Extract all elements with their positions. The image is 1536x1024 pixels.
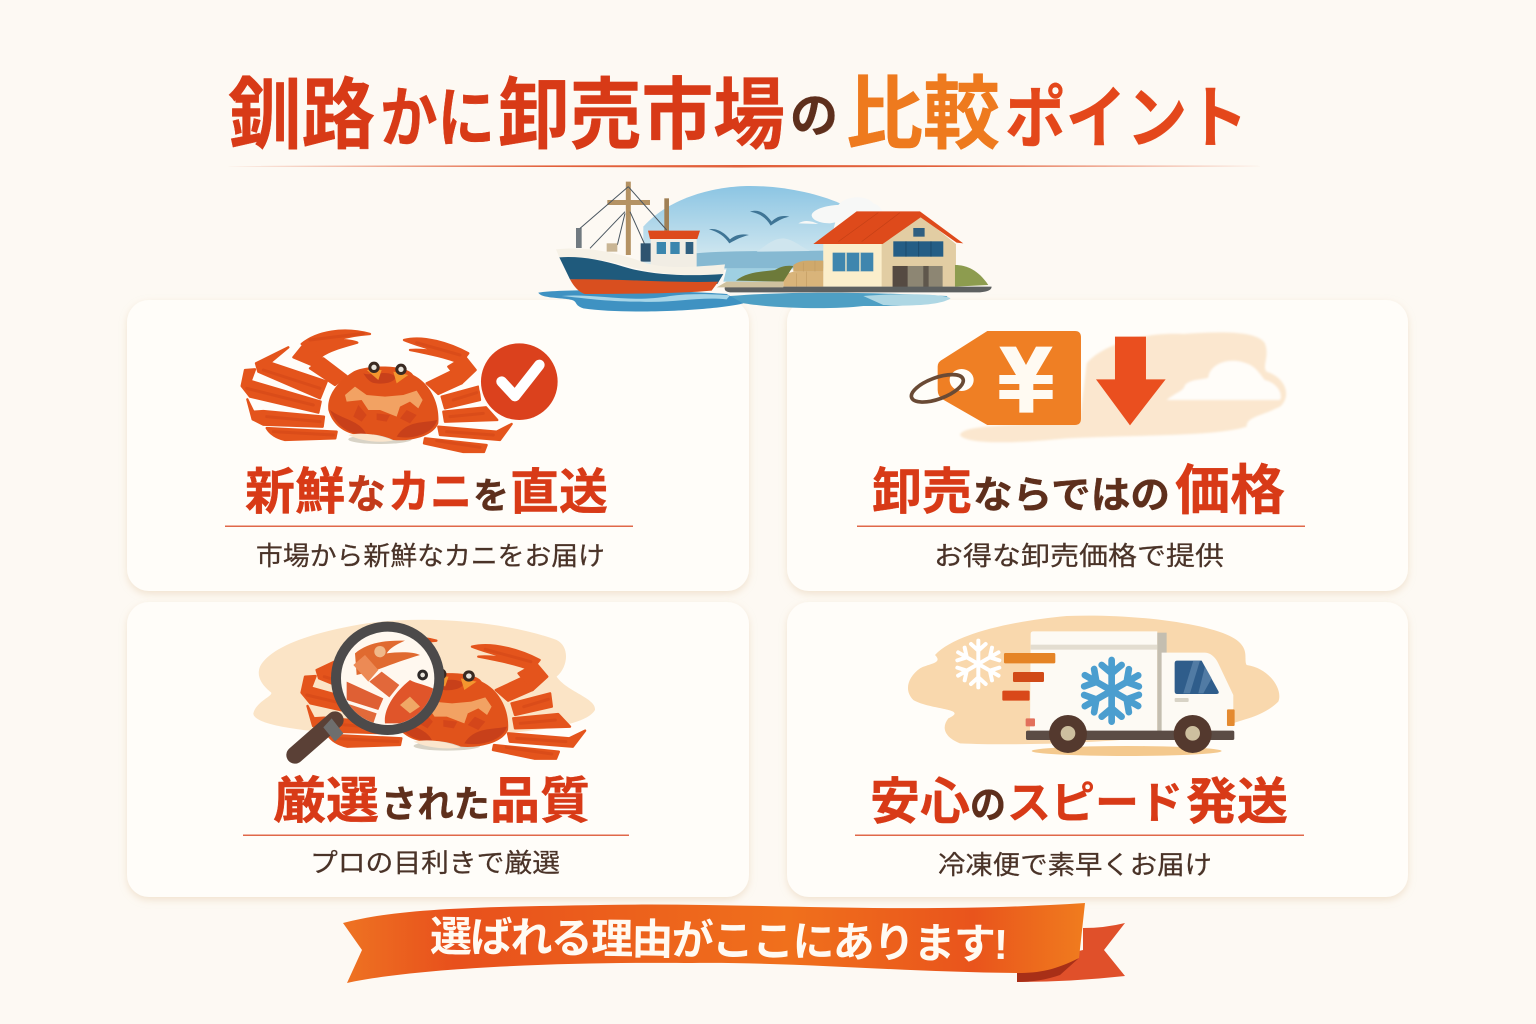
ribbon tail <box>1017 923 1125 982</box>
heading <box>870 774 1288 830</box>
illustration: harbor scene <box>538 182 992 311</box>
fishing boat <box>556 182 725 294</box>
ribbon body <box>343 903 1085 983</box>
heading: 新鮮 <box>245 464 345 520</box>
heading: な <box>346 473 386 517</box>
icon: crab with check <box>242 331 560 452</box>
water <box>730 293 948 308</box>
heading rule <box>855 834 1304 836</box>
title underline <box>225 165 1265 168</box>
heading: 品質 <box>490 773 590 829</box>
heading: の <box>970 785 1006 827</box>
panel: fresh crab <box>127 300 749 591</box>
panel: wholesale price <box>787 300 1408 591</box>
heading: を <box>473 475 509 516</box>
heading: された <box>381 784 490 825</box>
heading: 発送 <box>1186 774 1288 830</box>
banner ribbon <box>343 903 1125 983</box>
icon: price tag with down arrow <box>908 331 1286 442</box>
clouds <box>812 197 883 223</box>
subtext: 冷凍便で素早くお届け <box>938 850 1212 880</box>
title <box>228 70 1248 159</box>
heading: ならではの <box>973 475 1170 517</box>
panel: speedy delivery <box>787 602 1408 897</box>
heading: 安心 <box>870 774 970 830</box>
heading <box>245 464 608 520</box>
heading: 価格 <box>1175 461 1285 521</box>
heading: 厳選 <box>273 773 379 829</box>
subtext: 市場から新鮮なカニをお届け <box>256 541 605 571</box>
bales <box>783 272 823 287</box>
icon: refrigerated truck <box>908 616 1279 756</box>
title: 卸売市場 <box>498 71 785 159</box>
title: かに <box>380 81 495 155</box>
subtext: プロの目利きで厳選 <box>310 848 560 878</box>
ribbon fold <box>1017 958 1079 982</box>
subtext: お得な卸売価格で提供 <box>934 541 1224 571</box>
trees and quay <box>736 266 793 282</box>
heading <box>872 461 1285 521</box>
heading: 卸売 <box>872 464 972 520</box>
heading rule <box>225 526 633 527</box>
icon: blue snowflake <box>1080 660 1143 722</box>
heading: 直送 <box>510 466 608 520</box>
warehouse <box>823 243 883 287</box>
title: 釧路 <box>228 71 375 159</box>
heading: スピード <box>1007 779 1183 828</box>
sky dome <box>643 186 840 270</box>
title: 比較 <box>846 70 1000 159</box>
heading rule <box>243 834 629 836</box>
heading: カニ <box>388 466 472 518</box>
heading <box>273 773 590 829</box>
icon: crab under magnifying glass <box>253 620 595 759</box>
title: ポイント <box>1005 81 1248 157</box>
panel: selected quality <box>127 602 749 897</box>
banner text: 選ばれる理由がここにあります! <box>430 913 1008 968</box>
heading rule <box>857 526 1305 527</box>
icon: white snowflake <box>954 641 1002 687</box>
birds <box>750 211 789 226</box>
title: の <box>790 90 838 143</box>
